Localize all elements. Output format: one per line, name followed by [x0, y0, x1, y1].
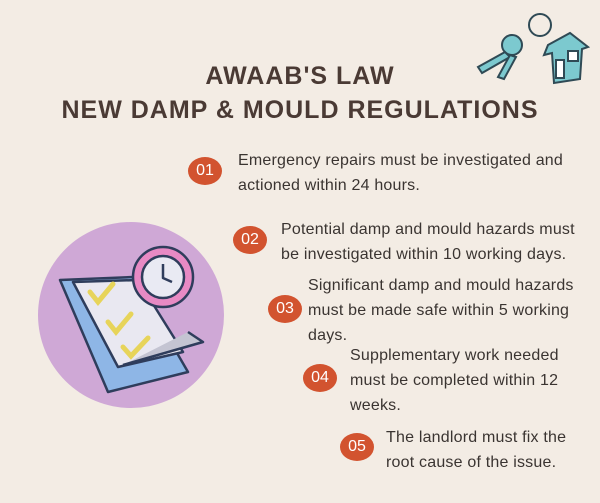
text: Supplementary work needed [350, 347, 559, 364]
text: must be made safe within 5 working [308, 302, 569, 319]
text: root cause of the issue. [386, 454, 556, 471]
text: days. [308, 327, 347, 344]
text: 04 [311, 369, 329, 386]
text: Emergency repairs must be investigated and [238, 152, 563, 169]
item 03 [268, 277, 574, 344]
title [61, 62, 539, 124]
item 04 [303, 347, 559, 414]
text: be investigated within 10 working days. [281, 246, 566, 263]
text: Potential damp and mould hazards must [281, 221, 575, 238]
item 02 [233, 221, 575, 263]
item 01 [188, 152, 563, 194]
illustration: checklist and clock [38, 222, 224, 408]
text: 01 [196, 162, 214, 179]
text: weeks. [350, 397, 401, 414]
text: The landlord must fix the [386, 429, 566, 446]
text: 02 [241, 231, 259, 248]
text: 03 [276, 300, 294, 317]
text: 05 [348, 438, 366, 455]
text: actioned within 24 hours. [238, 177, 420, 194]
icon: house keys [476, 13, 590, 84]
item 05 [340, 429, 566, 471]
text: must be completed within 12 [350, 372, 558, 389]
text: Significant damp and mould hazards [308, 277, 574, 294]
title: AWAAB'S LAW [205, 62, 395, 90]
title: NEW DAMP & MOULD REGULATIONS [61, 96, 539, 124]
